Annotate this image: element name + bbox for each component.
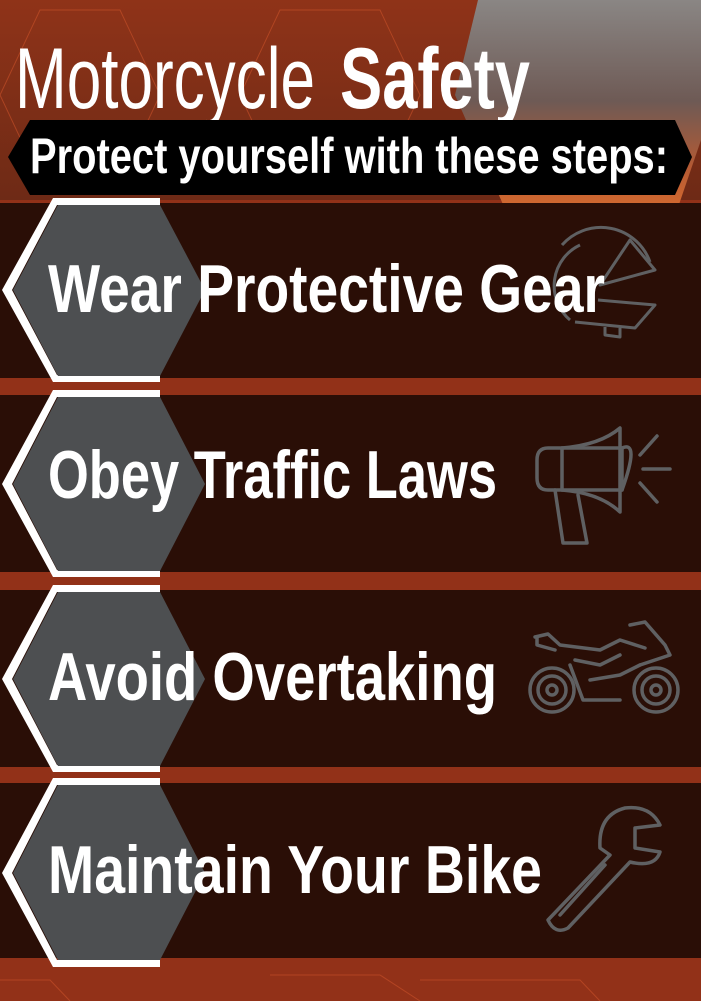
icon: motorcycle (530, 622, 678, 712)
panel: Maintain Your Bike: Maintain Your Bike (48, 832, 542, 908)
icon: megaphone (537, 428, 670, 543)
panel: Avoid Overtaking (0, 585, 701, 772)
panel: Obey Traffic Laws: Obey Traffic Laws (48, 437, 497, 513)
panel: Wear Protective Gear (0, 198, 701, 382)
title: Safety (340, 31, 530, 127)
icon: helmet (554, 227, 655, 337)
icon: wrench (548, 808, 660, 930)
panel: Maintain Your Bike (0, 778, 701, 967)
panel: Avoid Overtaking: Avoid Overtaking (48, 639, 497, 715)
photo hexagon: motorcycle image (455, 0, 701, 225)
panel: Obey Traffic Laws (0, 390, 701, 577)
title: Motorcycle (15, 31, 315, 127)
